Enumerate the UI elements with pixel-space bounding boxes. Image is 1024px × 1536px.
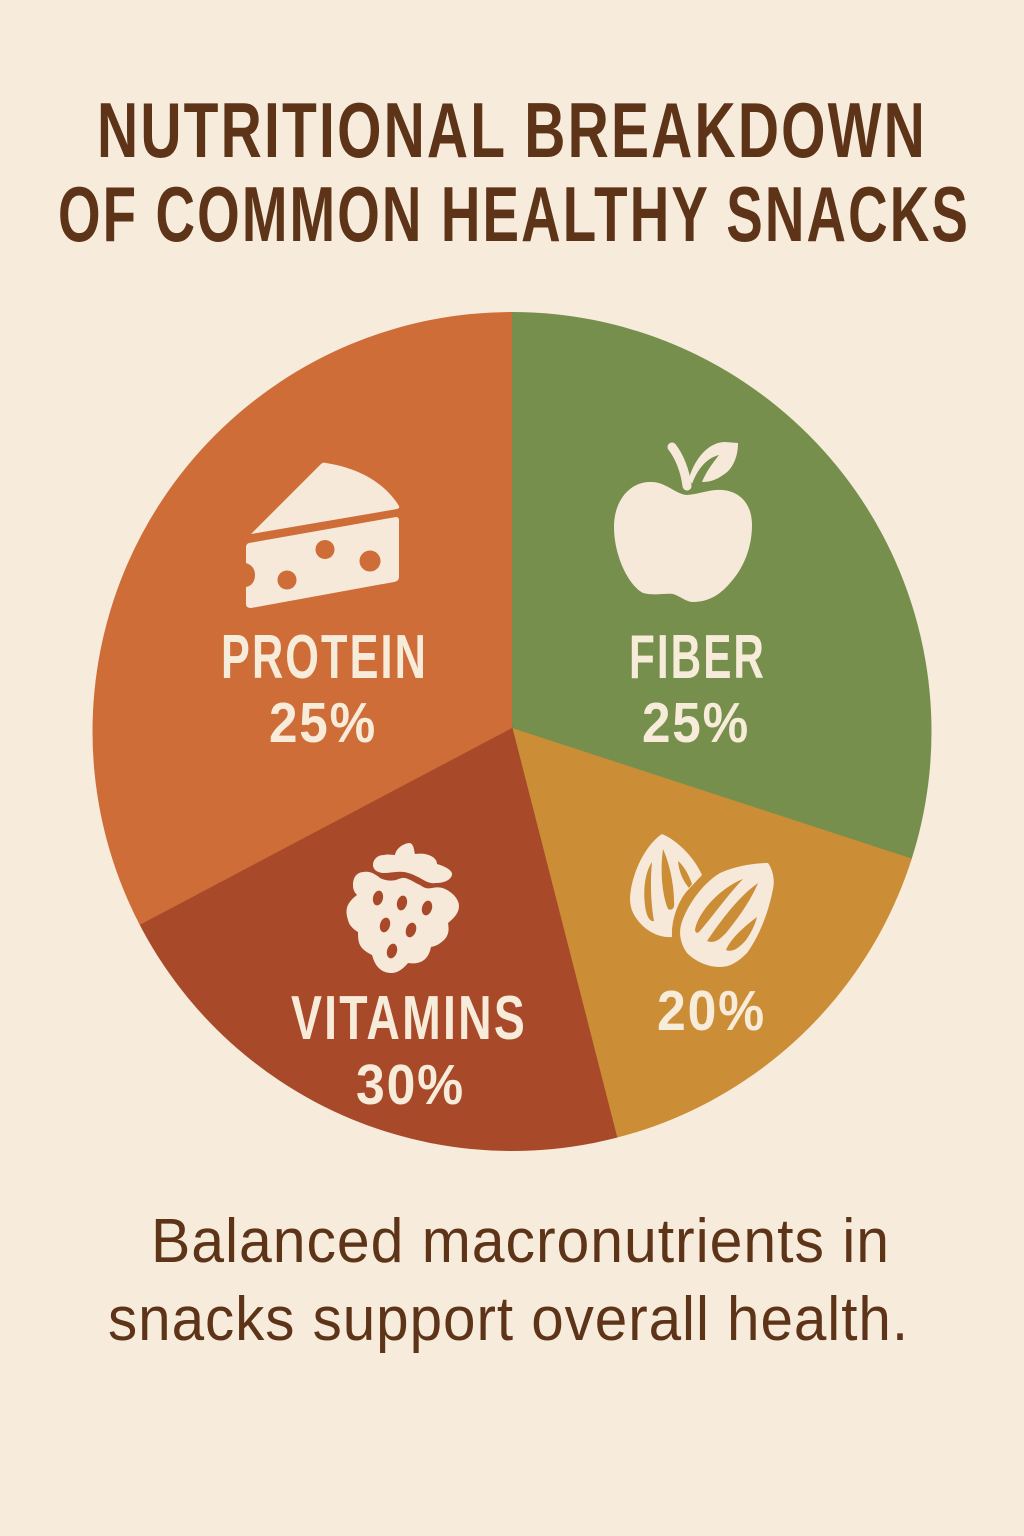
icon: berry xyxy=(346,843,459,973)
icon: apple xyxy=(614,442,752,602)
label: protein xyxy=(221,623,428,755)
label: fiber: 25% xyxy=(642,691,750,755)
label: fiber: FIBER xyxy=(629,623,766,692)
icon: cheese xyxy=(246,463,399,608)
label: vitamins: 30% xyxy=(356,1053,465,1117)
label: protein: PROTEIN xyxy=(221,623,428,692)
panel: protein slice xyxy=(92,312,512,925)
panel: fiber slice xyxy=(512,312,932,861)
icon: almonds xyxy=(630,834,774,967)
label: almonds percentage: 20% xyxy=(657,979,766,1043)
panel: vitamins slice xyxy=(138,726,618,1151)
label: vitamins xyxy=(291,984,527,1117)
label: fiber xyxy=(629,623,766,755)
label: vitamins: VITAMINS xyxy=(291,984,527,1053)
label: protein: 25% xyxy=(269,691,377,755)
footer text xyxy=(108,1207,909,1354)
title xyxy=(58,86,970,258)
footer text: Balanced macronutrients in xyxy=(151,1207,890,1276)
footer text: snacks support overall health. xyxy=(108,1285,909,1354)
pie chart xyxy=(92,312,932,1151)
panel: fats slice xyxy=(512,728,912,1138)
